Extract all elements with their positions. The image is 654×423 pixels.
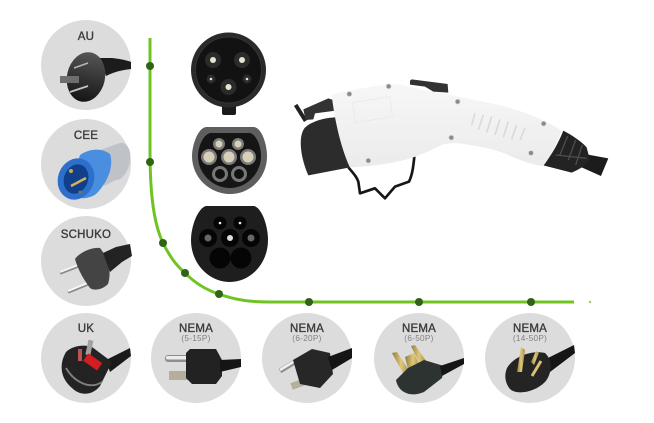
- gun front latch: [303, 98, 336, 120]
- plug badge: UK: [41, 313, 131, 403]
- connector: bottom black seven-pin socket: [191, 206, 268, 282]
- connector: top five-pin round socket: [191, 32, 266, 115]
- plug badge: SCHUKO: [41, 216, 132, 306]
- gun grip ribs: [472, 113, 525, 140]
- plug badge: NEMA 5-15P: (5-15P): [181, 334, 211, 343]
- plug badge: AU: [41, 20, 131, 110]
- gun rear boot: [543, 131, 590, 173]
- gun label panel: [352, 97, 392, 123]
- gun rear cable: [582, 154, 608, 176]
- plug badge: NEMA 6-20P: [262, 313, 352, 403]
- plug badge: CEE: CEE: [74, 130, 98, 142]
- gun cable tether: [348, 157, 414, 198]
- plug badge: AU: AU: [78, 31, 94, 43]
- plug badge: NEMA 6-50P: NEMA: [402, 323, 436, 335]
- plug badge: CEE: [41, 119, 131, 209]
- connector: middle grey seven-pin socket: [192, 127, 267, 194]
- plug badge: NEMA 14-50P: NEMA: [513, 323, 547, 335]
- plug badge: SCHUKO: SCHUKO: [61, 229, 111, 241]
- plug badge: NEMA 14-50P: [485, 313, 575, 403]
- gun screws: [347, 84, 546, 163]
- plug badge: NEMA 14-50P: (14-50P): [513, 334, 547, 343]
- plug badge: NEMA 6-20P: NEMA: [290, 323, 324, 335]
- plug badge: UK: UK: [78, 323, 94, 335]
- plug badge: NEMA 5-15P: NEMA: [179, 323, 213, 335]
- plug badge: NEMA 6-50P: (6-50P): [404, 334, 434, 343]
- plug badge: NEMA 6-50P: [374, 313, 464, 403]
- gun white body: [332, 84, 562, 167]
- gun boot ribs: [556, 136, 587, 165]
- charging gun: [296, 79, 608, 198]
- plug badge: NEMA 5-15P: [151, 313, 241, 403]
- green connection line: [146, 38, 591, 306]
- gun top latch: [410, 79, 448, 93]
- gun front hook: [296, 105, 306, 121]
- plug badge: NEMA 6-20P: (6-20P): [292, 334, 322, 343]
- gun nose: [301, 117, 350, 175]
